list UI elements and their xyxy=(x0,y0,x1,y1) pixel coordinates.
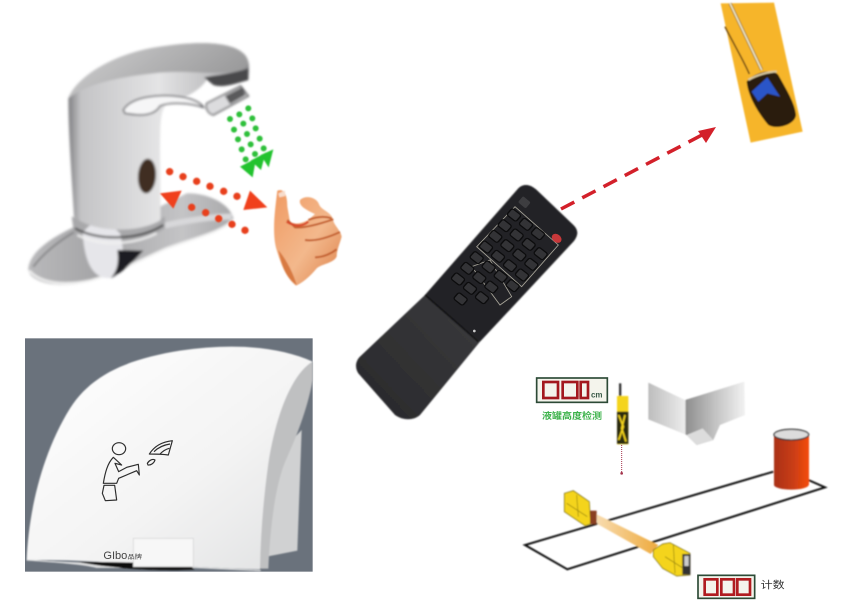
panel: hand dryer: 品牌 xyxy=(127,553,142,561)
dryer grey background xyxy=(25,338,313,572)
icon: remote control xyxy=(356,185,577,419)
water spray dots and arrows xyxy=(227,105,273,177)
remote red power button xyxy=(550,232,563,245)
receiver wires xyxy=(730,3,762,70)
dryer pictogram: person drying hands xyxy=(102,441,172,501)
faucet sensor window xyxy=(137,158,157,194)
red cylinder object xyxy=(774,429,809,490)
remote keypad buttons xyxy=(441,208,557,324)
dryer rear panel xyxy=(267,430,302,557)
sensor red dotted measurement line xyxy=(620,445,623,475)
label: height detection: 液罐高度检测 xyxy=(542,410,602,421)
icon: infrared receiver LED on yellow panel xyxy=(721,3,803,143)
right yellow photoelectric sensor xyxy=(653,543,690,576)
remote top logo button xyxy=(518,196,531,209)
label: count: 计数 xyxy=(761,579,785,592)
digital display: height xyxy=(537,378,607,402)
remote indicator xyxy=(473,330,476,332)
faucet body xyxy=(68,43,249,230)
conveyor belt outline xyxy=(525,472,825,569)
light beam xyxy=(596,514,658,554)
receiver yellow panel xyxy=(721,3,803,143)
icon: hand xyxy=(274,190,342,286)
digital display: height: cm xyxy=(591,391,603,400)
remote body xyxy=(356,185,577,419)
grey V-shaped reflector and ultrasonic head xyxy=(648,382,745,445)
vertical level sensor xyxy=(617,383,628,444)
dryer air outlet xyxy=(77,562,195,570)
faucet aerator xyxy=(206,86,248,115)
receiver LED capsule xyxy=(747,72,796,127)
remote keypad outline xyxy=(477,207,558,287)
arrow: infrared beam from remote to receiver xyxy=(561,127,716,209)
water arrowheads xyxy=(240,149,273,177)
dryer brand logo: GIbo xyxy=(103,550,127,562)
panel: hand dryer xyxy=(25,338,313,572)
dryer front shell xyxy=(27,347,313,569)
faucet base plate xyxy=(28,193,233,285)
dryer side shell xyxy=(259,362,313,569)
icon: sensor faucet xyxy=(28,43,249,285)
panel: industrial sensor diagram xyxy=(525,378,825,598)
infrared signal dots to and from hand xyxy=(160,168,267,234)
faucet collar xyxy=(72,217,165,242)
left yellow photoelectric sensor xyxy=(564,491,597,526)
digital display: counter xyxy=(698,575,755,598)
